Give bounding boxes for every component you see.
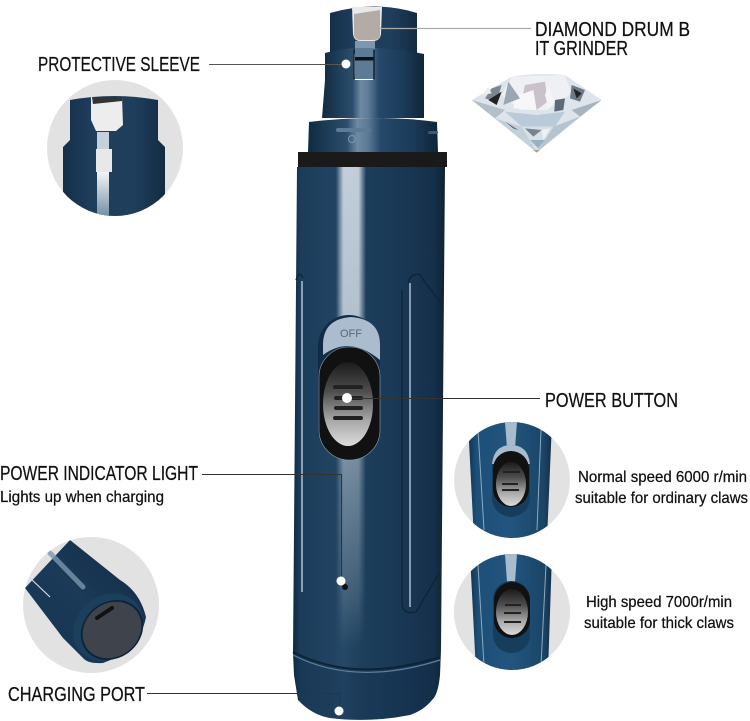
leader line <box>380 28 531 30</box>
black band <box>298 152 447 167</box>
switch black housing <box>319 347 380 460</box>
slider oval <box>323 362 373 446</box>
marker dot <box>342 393 352 403</box>
off label plate <box>323 317 380 360</box>
slider ridges <box>333 385 363 420</box>
leader line <box>147 694 340 709</box>
switch detail <box>468 422 552 540</box>
label: CHARGING PORT <box>8 684 145 706</box>
main body <box>293 167 445 720</box>
diamond drum window <box>352 7 382 49</box>
body highlight <box>336 167 366 650</box>
detail background <box>47 80 183 216</box>
panel: charging port <box>8 537 344 716</box>
collar marks <box>336 128 438 142</box>
callout: power indicator light <box>0 463 346 586</box>
panel: protective sleeve <box>38 54 350 218</box>
marker dot <box>334 706 344 716</box>
switch surround <box>318 315 380 460</box>
speed text: High speed 7000r/min <box>586 594 732 611</box>
panel: normal speed <box>454 422 748 540</box>
marker dot <box>342 60 350 68</box>
protective sleeve <box>322 48 424 118</box>
detail background <box>454 422 570 538</box>
leader line <box>347 398 540 400</box>
leader line <box>209 64 345 66</box>
detail background <box>454 554 570 670</box>
sleeve detail <box>63 96 165 218</box>
handle detail <box>25 540 146 664</box>
sublabel: Lights up when charging <box>0 489 164 506</box>
sleeve slot <box>354 48 374 79</box>
power switch <box>318 315 380 460</box>
callout: power button <box>342 390 678 412</box>
speed text <box>584 594 734 632</box>
body side slits <box>302 281 410 607</box>
product: nail grinder <box>293 6 447 720</box>
speed text: suitable for thick claws <box>584 615 734 632</box>
grinder top cap <box>330 6 417 54</box>
label: POWER INDICATOR LIGHT <box>0 463 198 485</box>
marker dot <box>336 576 346 586</box>
icon: diamond <box>472 74 602 153</box>
off label: OFF <box>340 328 362 340</box>
callout: diamond drum <box>380 19 690 60</box>
indicator hole <box>342 584 348 590</box>
label: DIAMOND DRUM B <box>535 19 690 41</box>
leader line <box>202 474 342 580</box>
body grooves <box>296 274 442 613</box>
speed text <box>575 469 748 507</box>
detail background <box>23 537 159 673</box>
base seam <box>293 652 440 672</box>
panel: high speed <box>454 554 734 672</box>
label: POWER BUTTON <box>545 390 678 412</box>
switch detail <box>470 554 552 672</box>
label second line: IT GRINDER <box>535 38 628 60</box>
label: PROTECTIVE SLEEVE <box>38 54 200 76</box>
base shading <box>293 652 440 720</box>
collar <box>308 118 438 152</box>
